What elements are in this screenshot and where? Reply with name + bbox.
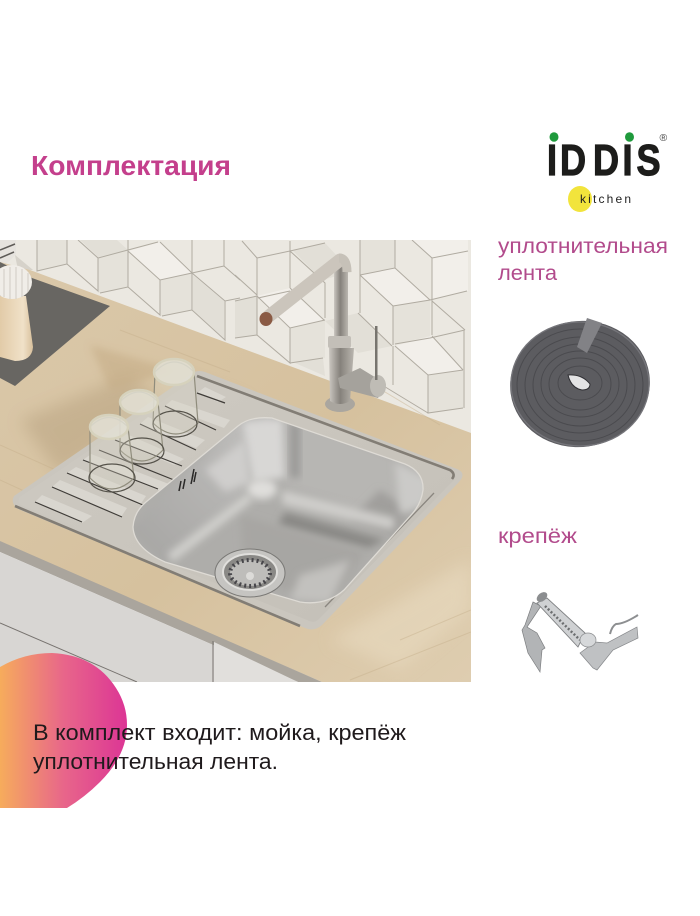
logo wordmark: IDDIS bbox=[547, 136, 661, 185]
clip prong bbox=[610, 615, 638, 634]
drain strainer bbox=[215, 549, 285, 597]
sink rim bbox=[13, 371, 463, 629]
faucet lever bbox=[338, 368, 386, 398]
faucet column bbox=[334, 265, 348, 340]
glass front bbox=[90, 418, 134, 489]
roll centre hole bbox=[568, 375, 590, 390]
label: sealing tape: лента bbox=[498, 262, 557, 285]
clip screw head bbox=[535, 590, 549, 604]
label: sealing tape: уплотнительная bbox=[498, 235, 668, 258]
glass middle bbox=[120, 392, 163, 461]
roll body bbox=[502, 312, 658, 456]
striped tiles bbox=[80, 240, 391, 376]
cabinet fronts bbox=[0, 552, 298, 682]
fastener clip bbox=[522, 590, 638, 672]
faucet base and body bbox=[325, 398, 355, 412]
rim shadow edges bbox=[15, 376, 454, 626]
logo yellow spot bbox=[568, 186, 592, 212]
faucet bbox=[260, 258, 386, 412]
body text bbox=[33, 720, 406, 774]
logo: IDDIS kitchen bbox=[547, 132, 668, 212]
lighter tile faces bbox=[128, 240, 468, 375]
tape loose end bbox=[577, 318, 602, 353]
rim groove bbox=[325, 493, 434, 607]
pepper mill bbox=[0, 265, 33, 361]
sink deck bbox=[19, 377, 455, 622]
glass back bbox=[153, 362, 198, 434]
body text: уплотнительная лента. bbox=[33, 749, 278, 774]
wood grain shading bbox=[0, 330, 471, 680]
logo kitchen word: kitchen bbox=[580, 192, 631, 206]
faucet collar bbox=[328, 336, 351, 348]
label: fasteners: крепёж bbox=[498, 525, 577, 548]
spout tip bbox=[260, 312, 272, 326]
overflow slots bbox=[179, 469, 196, 491]
sink bbox=[13, 371, 463, 629]
logo registered mark: ® bbox=[660, 132, 668, 144]
clip jaw bbox=[522, 602, 545, 672]
tile joints bbox=[37, 240, 468, 413]
logo green dot right bbox=[625, 132, 634, 142]
clip threaded bar bbox=[537, 598, 585, 647]
sink bowl bbox=[130, 415, 430, 610]
kitchen sink photo bbox=[0, 240, 471, 682]
tiled wall bbox=[0, 240, 471, 450]
sealing tape roll bbox=[502, 312, 658, 456]
gradient blob bbox=[0, 653, 127, 808]
clip body and bracket bbox=[580, 627, 638, 670]
body text: В комплект входит: мойка, крепёж bbox=[33, 720, 406, 745]
countertop front edge bbox=[0, 541, 322, 682]
bowl edge bbox=[133, 418, 423, 603]
title: Комплектация bbox=[31, 150, 231, 181]
drainboard ribs bbox=[35, 387, 230, 523]
logo green dot left bbox=[550, 132, 558, 142]
ceramic stack bbox=[0, 243, 32, 270]
countertop bbox=[0, 262, 471, 682]
glasses bbox=[89, 359, 198, 492]
label: sealing tape bbox=[498, 235, 668, 285]
grey mat bbox=[0, 262, 110, 386]
lever rod bbox=[375, 326, 378, 380]
clip roller bbox=[580, 633, 596, 647]
roll edge highlight bbox=[511, 322, 649, 446]
roll windings bbox=[517, 329, 643, 441]
faucet spout bbox=[269, 260, 340, 316]
